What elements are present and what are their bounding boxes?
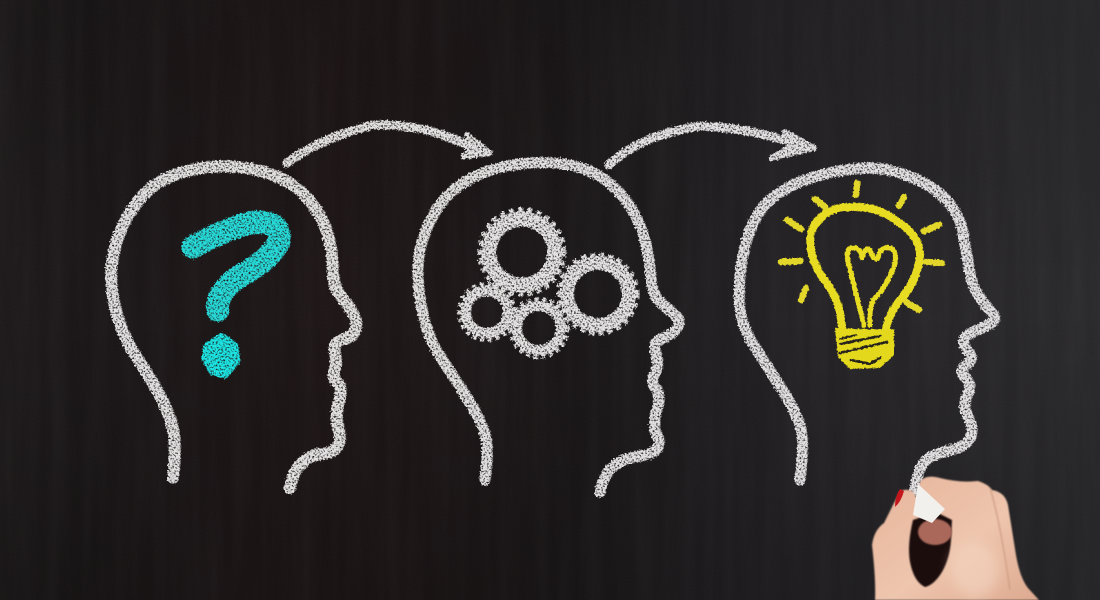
bulb screw base <box>835 328 894 369</box>
piece of chalk <box>913 484 945 523</box>
hand holding chalk <box>872 477 1039 600</box>
icon: teal question mark <box>193 222 279 377</box>
hand shape <box>872 477 1039 600</box>
shadow gap between thumb and fingers <box>909 512 952 587</box>
curled finger <box>918 519 952 545</box>
icon: yellow light bulb with rays <box>781 183 942 369</box>
knuckle highlight <box>951 542 999 598</box>
head outline: right <box>739 168 995 490</box>
bulb rays <box>781 183 942 310</box>
icon: four chalk gears <box>460 211 636 356</box>
arrow: left head to middle head <box>287 125 490 163</box>
head outline: left <box>111 166 356 488</box>
arrow: middle head to right head <box>609 126 814 165</box>
bulb outline and filament <box>810 207 920 330</box>
head outline: middle <box>418 162 679 492</box>
red fingernail <box>895 489 904 507</box>
index finger to hand crease <box>990 488 1010 590</box>
